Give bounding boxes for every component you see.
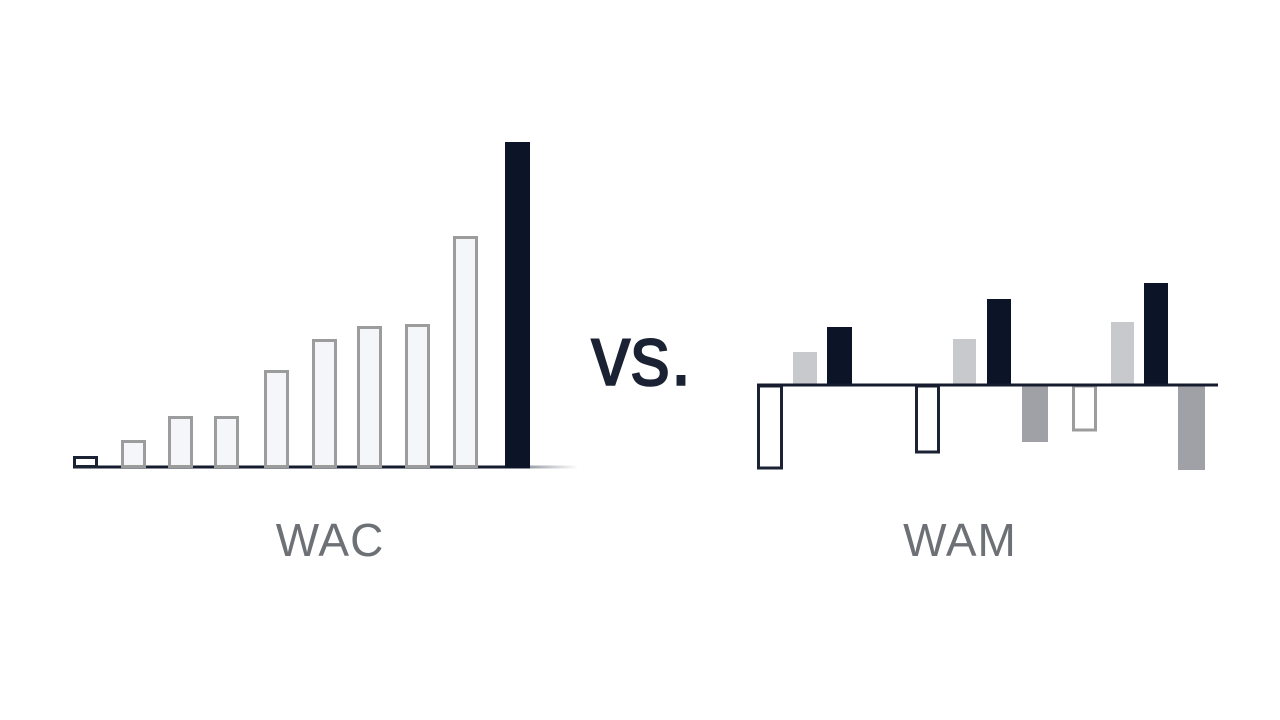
chart: WAC ascending bars xyxy=(73,142,578,468)
label: WAC: WAC xyxy=(276,514,384,566)
label: WAM: WAM xyxy=(903,514,1017,566)
chart: WAM positive/negative bars xyxy=(757,283,1218,470)
vs. label: vs. xyxy=(591,308,692,404)
